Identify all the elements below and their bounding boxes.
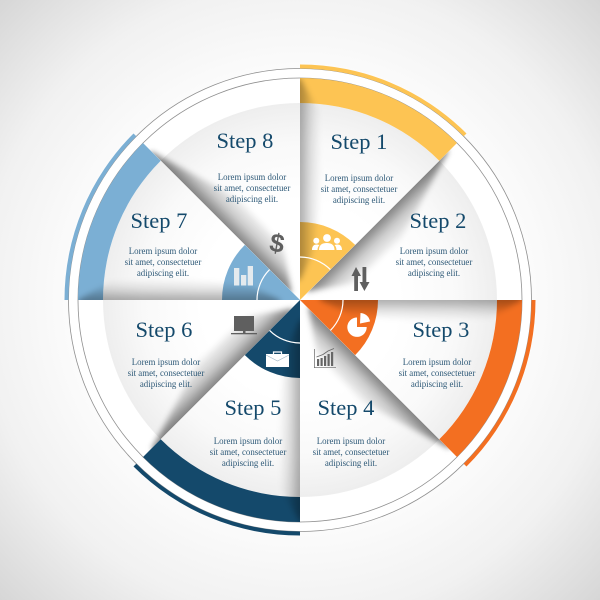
inner disc xyxy=(78,78,522,522)
outer ring xyxy=(68,68,532,532)
panel: step 6 xyxy=(103,300,294,450)
heading: step 6: Step 6 xyxy=(136,317,192,342)
text: step 6: sit amet, consectetuer xyxy=(128,368,204,378)
text: step 3: sit amet, consectetuer xyxy=(399,368,475,378)
text: step 3: adipiscing elit. xyxy=(411,379,463,389)
heading: step 7: Step 7 xyxy=(131,208,187,233)
accent arc: blue xyxy=(64,134,136,300)
panel: step 8 xyxy=(150,103,300,294)
icon: dollar: $ xyxy=(267,227,287,259)
icon: pie chart xyxy=(347,313,370,337)
panel: step 5 xyxy=(134,300,300,536)
text: step 1: sit amet, consectetuer xyxy=(321,184,397,194)
heading: step 4: Step 4 xyxy=(318,395,374,420)
accent arc: orange xyxy=(464,300,536,466)
icon: arrows xyxy=(352,267,370,291)
accent arc: yellow xyxy=(300,64,466,136)
text: step 7: adipiscing elit. xyxy=(137,268,189,278)
text: step 4: Lorem ipsum dolor xyxy=(317,436,385,446)
panel: step 3 xyxy=(300,300,536,466)
panel: step 1 xyxy=(300,64,466,300)
text: step 1: Lorem ipsum dolor xyxy=(325,173,393,183)
text: step 2: sit amet, consectetuer xyxy=(396,257,472,267)
text: step 7: Lorem ipsum dolor xyxy=(129,246,197,256)
text: step 8: Lorem ipsum dolor xyxy=(218,172,286,182)
icon: monitor xyxy=(231,316,257,334)
text: step 4: adipiscing elit. xyxy=(325,458,377,468)
heading: step 8: Step 8 xyxy=(217,128,273,153)
text: step 7: sit amet, consectetuer xyxy=(125,257,201,267)
accent arc: navy xyxy=(134,464,300,536)
text: step 6: Lorem ipsum dolor xyxy=(132,357,200,367)
icon: people xyxy=(312,234,342,250)
heading: step 5: Step 5 xyxy=(225,395,281,420)
heading: step 1: Step 1 xyxy=(331,129,387,154)
text: step 5: Lorem ipsum dolor xyxy=(214,436,282,446)
text: step 5: sit amet, consectetuer xyxy=(210,447,286,457)
text: step 4: sit amet, consectetuer xyxy=(313,447,389,457)
panel: step 4 xyxy=(300,306,450,497)
text: step 2: Lorem ipsum dolor xyxy=(400,246,468,256)
text: step 2: adipiscing elit. xyxy=(408,268,460,278)
icon: bar chart xyxy=(234,266,253,286)
icon: briefcase xyxy=(266,352,289,367)
text: step 5: adipiscing elit. xyxy=(222,458,274,468)
text: step 8: adipiscing elit. xyxy=(226,194,278,204)
text: step 3: Lorem ipsum dolor xyxy=(403,357,471,367)
text: step 8: sit amet, consectetuer xyxy=(214,183,290,193)
panel: step 2 xyxy=(306,150,497,300)
text: step 1: adipiscing elit. xyxy=(333,195,385,205)
text: step 6: adipiscing elit. xyxy=(140,379,192,389)
icon: growth chart xyxy=(314,348,336,368)
panel: step 7 xyxy=(64,134,300,300)
heading: step 3: Step 3 xyxy=(413,317,469,342)
heading: step 2: Step 2 xyxy=(410,208,466,233)
